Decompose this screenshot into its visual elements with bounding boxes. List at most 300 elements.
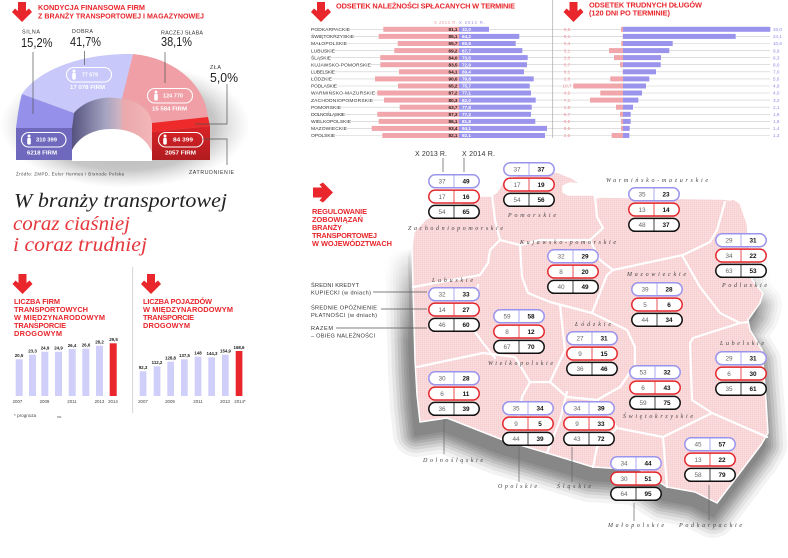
heading: number of vehicles: LICZBA POJAZDÓW: [143, 297, 212, 306]
values 2013: 0,1: [564, 34, 571, 39]
values 2014: 3,2: [773, 98, 780, 103]
legend: total turnover: [311, 326, 427, 340]
values 2014: 2,1: [773, 105, 780, 110]
values 2013: 69,2: [449, 48, 458, 53]
values 2014: 73,5: [462, 55, 471, 60]
map labels: Podkarpackie: [678, 523, 742, 529]
pills: warminsko-mazurskie: 14: [662, 207, 670, 214]
pills: podkarpackie: 79: [718, 472, 726, 479]
values 2014: 64,2: [462, 34, 471, 39]
values 2014: 8,3: [773, 55, 780, 60]
pills: malopolskie: 64: [620, 491, 628, 498]
bar chart: vehicles: 168,6: [234, 345, 245, 350]
pill: dobra employment: [66, 68, 112, 82]
values 2014: 81,8: [462, 119, 471, 124]
pills: warminsko-mazurskie: 23: [662, 192, 670, 198]
pills: dolnoslaskie: 36: [438, 406, 446, 413]
bar chart: firms: 24,9: [54, 346, 63, 350]
pills: warminsko-mazurskie: 13: [638, 207, 646, 214]
label: raczej slaba: 38,1%: [161, 35, 192, 49]
values 2013: 10,7: [563, 84, 572, 89]
panel: share of bad debts: [563, 0, 782, 138]
icon: red down arrow: [564, 2, 584, 22]
legend: payment delay: [311, 304, 427, 319]
bar chart: vehicles: 2014*: [234, 399, 246, 404]
values 2014: 69,4: [462, 70, 471, 74]
bar chart: firms: 26,4: [68, 343, 77, 348]
pills: zachodniopomorskie: 16: [462, 194, 470, 201]
legend: payment delay: PŁATNOŚCI (w dniach): [311, 311, 377, 319]
pills: warminsko-mazurskie: 37: [662, 222, 670, 229]
bar chart: firms: 23,3: [28, 348, 37, 354]
legend: years: X 2014 R.: [459, 20, 485, 25]
legend: total turnover: RAZEM: [311, 326, 333, 332]
map labels: Zachodniopomorskie: [408, 226, 503, 232]
pills: swietokrzyskie: 75: [663, 400, 671, 407]
pills: dolnoslaskie: 28: [462, 376, 470, 382]
pills: lubelskie: 35: [725, 386, 733, 393]
values 2013: 0,5: [564, 119, 571, 124]
legend: trade credit: [311, 281, 427, 296]
pills: pomorskie: 37: [537, 166, 545, 174]
heading: number of firms: [14, 297, 105, 338]
map labels: Podlaskie: [721, 283, 767, 289]
row labels: MAZOWIECKIE: [311, 126, 348, 132]
pills: podkarpackie: 13: [694, 457, 702, 464]
bars 2013: [372, 27, 459, 138]
values 2013: 63,7: [449, 105, 458, 110]
leader lines: [33, 51, 227, 165]
pills: lubuskie: 46: [438, 322, 446, 329]
pills: swietokrzyskie: 6: [641, 385, 645, 392]
pills: wielkopolskie: 8: [505, 329, 509, 336]
heading: number of firms: TRANSPORTOWYCH: [14, 305, 88, 314]
heading: bad debts: [589, 0, 702, 18]
pills: mazowieckie: 34: [665, 317, 673, 324]
footnote: * prognoza: [14, 413, 37, 418]
heading: bad debts: (120 DNI PO TERMINIE): [589, 8, 671, 18]
leader lines: [444, 419, 709, 521]
pills: lubelskie: 31: [749, 356, 757, 362]
values 2013: 65,7: [449, 41, 458, 46]
pills: malopolskie: 95: [644, 491, 652, 498]
label: zatrudnienie: ZATRUDNIENIE: [189, 170, 235, 176]
row labels: WIELKOPOLSKIE: [311, 119, 352, 125]
bar chart: vehicles: 128,8: [165, 356, 177, 360]
values 2013: 3,1: [564, 48, 571, 53]
bar chart: vehicles: 2011: [193, 399, 203, 404]
pills: podkarpackie: [685, 438, 735, 481]
pills: zachodniopomorskie: [429, 175, 479, 218]
row labels: [311, 27, 376, 139]
bar chart: vehicles: 92,3: [139, 365, 148, 370]
year labels with arrows: [415, 151, 495, 172]
pills: lubuskie: 14: [438, 307, 446, 314]
values 2013: 65,2: [449, 84, 458, 89]
values 2013: 84,0: [449, 55, 458, 60]
map labels: Pomorskie: [507, 213, 556, 219]
label: raczej slaba: [161, 30, 203, 49]
row labels: PODLASKIE: [311, 84, 338, 90]
pills: lubuskie: 60: [462, 322, 470, 329]
bar chart: firms: 24,9: [41, 346, 50, 350]
values 2014: 10,6: [773, 41, 782, 46]
bars 2013: [573, 27, 623, 138]
pills: lodzkie: [567, 332, 617, 375]
pills: wielkopolskie: 12: [527, 329, 535, 336]
pills: lubelskie: [716, 352, 766, 395]
pills: swietokrzyskie: 43: [663, 385, 671, 392]
panel: number of firms chart: [12, 274, 118, 419]
pills: slaskie: 72: [597, 436, 605, 443]
heading: bad debts: ODSETEK TRUDNYCH DŁUGÓW: [589, 0, 702, 10]
pills: swietokrzyskie: 32: [663, 370, 671, 376]
values 2013: [563, 27, 572, 138]
values 2014: 77,1: [462, 91, 471, 96]
heading: financial condition: [38, 3, 204, 20]
row labels: LUBUSKIE: [311, 48, 336, 54]
bars 2014: [459, 27, 547, 138]
legend: payment delay: ŚREDNIE OPÓŹNIENIE: [311, 304, 377, 312]
values 2014: 72,9: [462, 62, 471, 67]
pills: zachodniopomorskie: 65: [462, 209, 470, 216]
label: dobra: [70, 29, 101, 49]
pills: slaskie: [564, 402, 614, 445]
values 2014: 4,9: [773, 84, 780, 89]
bar chart: vehicles: [138, 345, 246, 404]
values 2014: 82,0: [462, 98, 471, 103]
title: i coraz trudniej: [13, 234, 147, 256]
panel: number of vehicles chart: [138, 274, 246, 404]
values 2013: 87,3: [449, 112, 458, 117]
label: zla firms: 2057 FIRM: [165, 150, 197, 156]
row labels: WARMIŃSKO-MAZURSKIE: [311, 90, 376, 97]
values 2013: 0,7: [564, 112, 571, 117]
legend: trade credit: ŚREDNI KREDYT: [311, 281, 360, 289]
heading: financial condition: KONDYCJA FINANSOWA FIRM: [38, 3, 145, 12]
values 2014: 77,2: [462, 112, 471, 117]
values 2013: 64,1: [449, 70, 458, 74]
label: silna: SILNA: [22, 30, 40, 36]
values 2014: 94,1: [462, 126, 471, 131]
values 2013: 86,1: [449, 119, 458, 124]
values 2014: 67,7: [462, 48, 471, 53]
row labels: ŚWIĘTOKRZYSKIE: [311, 32, 355, 40]
label: dobra: 41,7%: [70, 35, 101, 49]
pills: podlaskie: 34: [725, 253, 733, 260]
heading: regulating liabilities: W WOJEWÓDZTWACH: [312, 239, 392, 248]
pills: dolnoslaskie: [429, 372, 479, 415]
map labels: Wielkopolskie: [488, 361, 553, 367]
bar chart: vehicles: 137,5: [179, 353, 191, 358]
pills: zachodniopomorskie: 54: [438, 209, 446, 216]
values 2014: 1,6: [773, 119, 780, 124]
label: silna: [21, 30, 52, 50]
values 2013: 0,4: [564, 41, 571, 46]
pills: podlaskie: 31: [749, 238, 757, 244]
pills: zachodniopomorskie: 49: [462, 178, 470, 186]
values 2013: 83,5: [449, 62, 458, 67]
pills: opolskie: 39: [536, 436, 544, 443]
panel: map of voivodeships: [408, 151, 768, 529]
pills: mazowieckie: [632, 283, 682, 326]
heading: number of vehicles: W MIĘDZYNARODOWYM: [143, 305, 233, 314]
bar chart: vehicles: 112,2: [152, 360, 163, 365]
pills: swietokrzyskie: 59: [639, 400, 647, 407]
values 2013: 7,1: [564, 98, 571, 103]
pills: mazowieckie: 44: [641, 317, 649, 324]
pills: malopolskie: [611, 457, 661, 500]
values 2013: 82,1: [449, 133, 458, 138]
bar chart: firms: 2007: [13, 399, 23, 404]
map labels: Kujawsko-pomorskie: [519, 240, 616, 246]
values 2013: 81,1: [449, 27, 458, 32]
map labels: Łódzkie: [574, 322, 611, 328]
year labels with arrows: X 2014 R.: [462, 151, 495, 158]
heading: receivables paid on time: ODSETEK NALEŻNOŚCI SPŁACANYCH W TERMINIE: [336, 2, 515, 10]
values 2013: 93,4: [449, 126, 458, 131]
bar chart: firms: 2011: [67, 399, 77, 404]
map of Poland: [412, 172, 768, 503]
heading: regulating liabilities: [312, 207, 392, 248]
pills: kujawsko-pomorskie: 20: [581, 269, 589, 276]
pills: lubelskie: 6: [727, 371, 731, 378]
values 2013: 1,8: [564, 105, 571, 110]
arch chart: [0, 54, 250, 188]
pills: warminsko-mazurskie: [629, 188, 679, 231]
map labels: Małopolskie: [607, 523, 664, 529]
pills: pomorskie: 56: [537, 197, 545, 204]
pills: lubelskie: 30: [749, 371, 757, 378]
pill: raczej slaba employment: [148, 88, 192, 103]
pills: opolskie: 5: [538, 421, 542, 428]
row labels: OPOLSKIE: [311, 133, 336, 139]
heading: number of vehicles: DROGOWYM: [143, 321, 190, 330]
pill: raczej slaba employment: 124 770: [163, 94, 183, 100]
map shadow: [408, 184, 764, 515]
pills: warminsko-mazurskie: 48: [638, 222, 646, 229]
panel: financial condition of firms: [0, 2, 250, 188]
pills: lubuskie: 33: [462, 292, 470, 298]
bar chart: firms: 26,6: [82, 342, 91, 348]
values 2013: 0,7: [564, 62, 571, 67]
pills: wielkopolskie: 59: [503, 314, 511, 320]
pill: dobra employment: 77 579: [82, 72, 98, 78]
icon: red down arrow: [12, 2, 32, 22]
icon: red down arrow: [311, 2, 331, 22]
values 2014: 1,4: [773, 126, 780, 131]
legend: total turnover: – OBIEG NALEŻNOŚCI: [311, 332, 375, 340]
heading: number of firms: TRANSPORCIE: [14, 321, 66, 330]
pills: opolskie: 34: [536, 406, 544, 412]
pills: malopolskie: 34: [620, 460, 628, 468]
label: zla: 5,0%: [210, 71, 238, 85]
bar chart: vehicles: 144,3: [206, 351, 218, 356]
values 2014: 79,8: [462, 77, 471, 82]
pills: kujawsko-pomorskie: 8: [559, 269, 563, 276]
pills: warminsko-mazurskie: 35: [638, 192, 646, 198]
pills: lubuskie: 32: [438, 292, 446, 298]
heading: regulating liabilities: ZOBOWIĄZAŃ: [312, 215, 363, 224]
pills: slaskie: 34: [573, 406, 581, 412]
values 2014: [773, 27, 782, 138]
values 2013: 90,0: [449, 77, 458, 82]
label: silna firms: 6218 FIRM: [27, 150, 58, 156]
pill: silna employment: 310 399: [36, 138, 57, 144]
label: zla: [210, 65, 238, 85]
bars 2014: [623, 27, 770, 138]
values 2013: 0,5: [564, 126, 571, 131]
values 2013: 4,9: [564, 91, 571, 96]
values 2013: [449, 27, 458, 138]
row labels: POMORSKIE: [311, 105, 342, 111]
title: W branży transportowej: [14, 190, 227, 212]
legend: trade credit: KUPIECKI (w dniach): [311, 290, 371, 296]
pills: mazowieckie: 39: [641, 286, 649, 294]
bar chart: firms: 2009: [40, 399, 50, 404]
values 2014: 75,7: [462, 84, 471, 89]
pills: lubuskie: 27: [462, 307, 470, 314]
divider: [132, 267, 134, 413]
pills: dolnoslaskie: 39: [462, 406, 470, 413]
heading: regulating liabilities: TRANSPORTOWEJ: [312, 231, 377, 240]
year labels with arrows: X 2013 R.: [415, 151, 447, 158]
pills: lodzkie: 46: [600, 366, 608, 373]
pills: podkarpackie: 45: [694, 442, 702, 448]
heading: number of vehicles: [143, 297, 233, 330]
pills: podlaskie: 53: [749, 268, 757, 275]
heading: number of firms: W MIĘDZYNARODOWYM: [14, 313, 105, 322]
pills: kujawsko-pomorskie: [548, 250, 598, 293]
pills: slaskie: 39: [597, 406, 605, 412]
icon: red down arrow: [141, 274, 161, 294]
pills: pomorskie: [504, 163, 554, 206]
values 2014: 60,5: [462, 41, 471, 46]
bar chart: firms: 2013: [95, 399, 105, 404]
title: coraz ciaśniej: [13, 213, 130, 235]
bar chart: firms: 29,5: [109, 337, 118, 342]
pills: dolnoslaskie: 6: [440, 391, 444, 398]
label: dobra: DOBRA: [72, 29, 93, 35]
row labels: MAŁOPOLSKIE: [311, 41, 348, 47]
pills: lodzkie: 27: [576, 336, 584, 342]
values 2013: 80,3: [449, 98, 458, 103]
values 2014: 92,1: [462, 133, 471, 138]
values 2013: 2,0: [564, 55, 571, 60]
values 2014: 24,1: [773, 34, 782, 39]
pills: lodzkie: 36: [576, 366, 584, 373]
pill: zla employment: 84 399: [173, 138, 193, 144]
pills: opolskie: 44: [512, 436, 520, 443]
pills: kujawsko-pomorskie: 32: [557, 254, 565, 260]
values 2014: 77,8: [462, 105, 471, 110]
row labels: PODKARPACKIE: [311, 27, 351, 33]
title: [13, 190, 227, 256]
values 2014: 33,0: [773, 27, 782, 32]
label: raczej slaba: RACZEJ SŁABA: [161, 30, 203, 36]
pills: pomorskie: 54: [513, 197, 521, 204]
pills: pomorskie: 17: [513, 182, 521, 189]
bar chart: vehicles: 154,9: [220, 348, 232, 354]
label: raczej slaba firms: 15 584 FIRM: [152, 106, 188, 112]
pills: lodzkie: 31: [600, 336, 608, 342]
values 2014: 7,0: [773, 70, 780, 74]
row labels: DOLNOŚLĄSKIE: [311, 110, 346, 118]
bar chart: firms: 28,2: [95, 340, 104, 344]
pills: kujawsko-pomorskie: 49: [581, 284, 589, 291]
map labels: Lubuskie: [431, 278, 473, 284]
map labels: Mazowieckie: [626, 272, 686, 278]
heading: number of firms: LICZBA FIRM: [14, 297, 60, 306]
values 2014: 1,3: [773, 133, 780, 138]
values 2013: 0,1: [564, 70, 571, 74]
values 2014: [462, 27, 471, 138]
row labels: ZACHODNIOPOMORSKIE: [311, 98, 374, 104]
legend: years: X 2013 R.: [434, 20, 457, 25]
values 2013: 85,1: [449, 34, 458, 39]
heading: number of firms: DROGOWYM: [14, 329, 62, 338]
row labels: LUBELSKIE: [311, 70, 336, 76]
pills: opolskie: 9: [514, 421, 518, 428]
bar chart: vehicles: 2009: [165, 399, 175, 404]
pills: slaskie: 43: [573, 436, 581, 443]
map labels: Dolnośląskie: [422, 458, 483, 464]
bar chart: firms: 2014: [108, 399, 118, 404]
pills: lubuskie: [429, 288, 479, 331]
pills: slaskie: 9: [575, 421, 579, 428]
map labels: Lubelskie: [719, 341, 764, 347]
pills: zachodniopomorskie: 37: [438, 178, 446, 186]
footnote: [14, 413, 62, 419]
pills: lodzkie: 15: [600, 351, 608, 358]
pills: wielkopolskie: 70: [527, 344, 535, 351]
pills: podlaskie: 22: [749, 253, 757, 260]
map labels: Warmińsko-mazurskie: [606, 178, 708, 184]
pill: silna employment: [22, 132, 66, 147]
map labels: Opolskie: [498, 484, 537, 490]
pills: malopolskie: 51: [644, 476, 652, 483]
pills: podkarpackie: 58: [694, 472, 702, 479]
row labels: ŁÓDZKIE: [311, 76, 333, 83]
heading: regulating liabilities: BRANŻY: [312, 223, 342, 232]
values 2014: 5,6: [773, 77, 780, 82]
pills: malopolskie: 44: [644, 460, 652, 468]
region borders: [413, 195, 767, 487]
values 2013: 2,5: [564, 133, 571, 138]
map labels: [408, 178, 767, 529]
heading: financial condition: Z BRANŻY TRANSPORTOWEJ I MAGAZYNOWEJ: [38, 12, 204, 20]
pills: podkarpackie: 22: [718, 457, 726, 464]
icon: red down arrow: [12, 274, 32, 294]
values 2014: 4,0: [773, 91, 780, 96]
legend: years: [434, 20, 485, 25]
map labels: Świętokrzyskie: [623, 412, 693, 420]
heading: regulating liabilities: REGULOWANIE: [312, 207, 367, 216]
values 2013: 0,5: [564, 27, 571, 32]
pills: dolnoslaskie: 30: [438, 376, 446, 382]
pills: opolskie: [503, 402, 553, 445]
pills: podlaskie: 29: [725, 238, 733, 244]
bar chart: vehicles: 148: [194, 350, 202, 356]
pills: wielkopolskie: 58: [527, 314, 535, 320]
values 2013: 2,8: [564, 77, 571, 82]
values 2014: 8,0: [773, 62, 780, 67]
bar chart: vehicles: 2013: [220, 399, 230, 404]
bar chart: vehicles: 2007: [138, 399, 148, 404]
pill: zla employment: [158, 132, 203, 147]
pills: dolnoslaskie: 11: [463, 391, 470, 398]
divider: [552, 0, 554, 138]
